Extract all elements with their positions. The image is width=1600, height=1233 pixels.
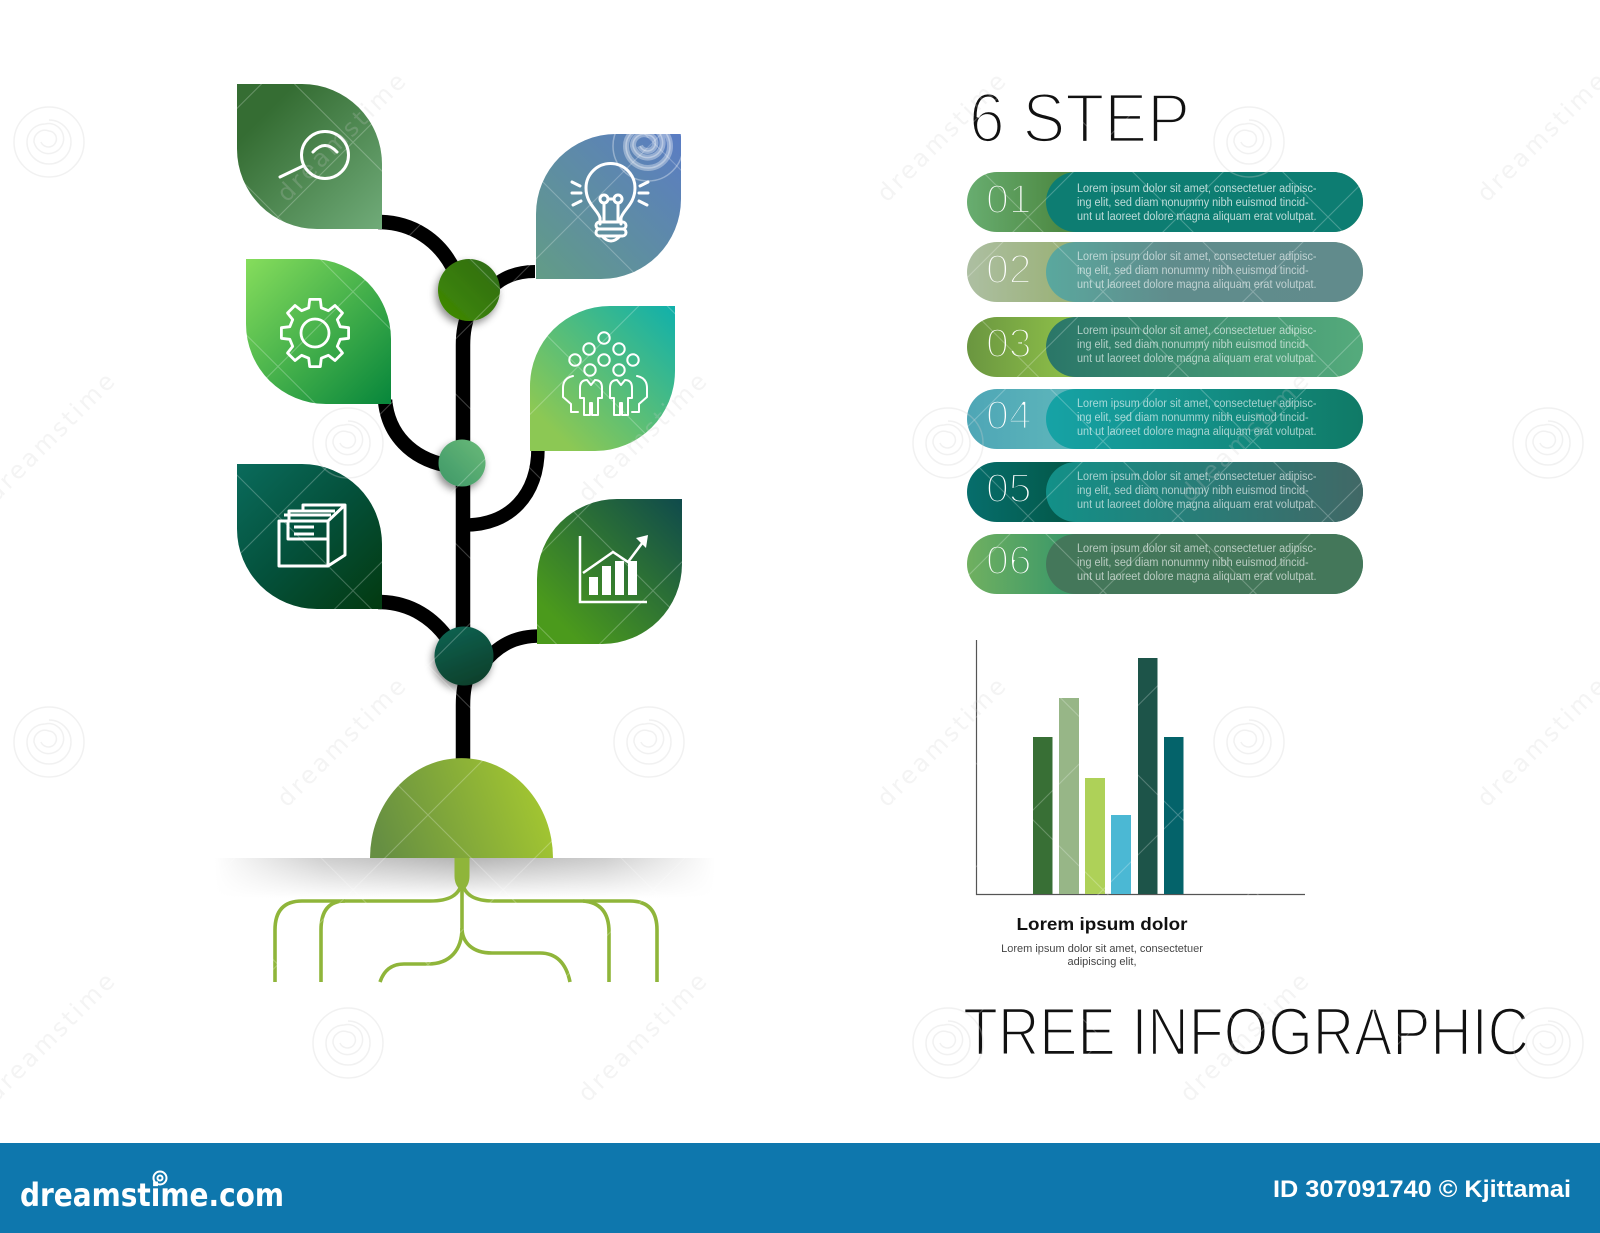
leaf: archive [237, 464, 382, 609]
step 01 [967, 172, 1363, 232]
step text 05: ing elit, sed diam nonummy nibh euismod tincid- [1077, 485, 1309, 497]
step text 06: ing elit, sed diam nonummy nibh euismod tincid- [1077, 557, 1309, 569]
watermark: dreamstime [271, 672, 411, 812]
icon: growth chart [580, 535, 648, 602]
leaf: idea [536, 134, 681, 279]
branch: leaf 2 [488, 272, 535, 292]
step text 05: unt ut laoreet dolore magna aliquam erat volutpat. [1077, 499, 1317, 511]
ground shadow [215, 858, 715, 898]
bar 5 [1138, 658, 1158, 894]
step number 01: 01 [986, 176, 1032, 222]
branch: leaf 3 [385, 400, 445, 465]
bar chart [976, 640, 1305, 894]
footer logo: dreamstime.com [20, 1176, 284, 1214]
bar 3 [1085, 778, 1105, 894]
icon: file box [279, 505, 345, 566]
step text 02: unt ut laoreet dolore magna aliquam erat volutpat. [1077, 279, 1317, 291]
step number 03: 03 [986, 320, 1032, 366]
footer credit: ID 307091740 © Kjittamai [1273, 1176, 1571, 1203]
watermark: dreamstime [572, 967, 712, 1107]
watermark: dreamstime [271, 67, 411, 207]
watermark: dreamstime [1174, 967, 1314, 1107]
footer logo spiral [154, 1172, 166, 1184]
icon: light bulb [572, 163, 648, 241]
node 2 [438, 440, 486, 486]
watermark: dreamstime [572, 367, 712, 507]
bar 2 [1059, 698, 1079, 894]
step text 03: Lorem ipsum dolor sit amet, consectetuer adipisc- [1077, 325, 1317, 337]
leaf: growth [537, 499, 682, 644]
step number 02: 02 [986, 246, 1032, 292]
step number 06: 06 [986, 537, 1032, 583]
watermark: dreamstime [871, 672, 1011, 812]
step text 01: ing elit, sed diam nonummy nibh euismod tincid- [1077, 197, 1309, 209]
branch: leaf 6 [482, 636, 540, 665]
step number 05: 05 [986, 465, 1032, 511]
step 03 [967, 317, 1363, 377]
chart caption: Lorem ipsum dolor sit amet, consectetuer [1001, 943, 1203, 955]
step number 04: 04 [986, 392, 1032, 438]
roots [275, 858, 657, 982]
step text 06: unt ut laoreet dolore magna aliquam erat volutpat. [1077, 571, 1317, 583]
branch: leaf 4 [465, 448, 538, 525]
leaf: settings [246, 259, 391, 404]
node 3 [434, 626, 494, 686]
title: 6 step: 6 STEP [969, 79, 1190, 157]
tree mound [370, 758, 553, 858]
watermark: dreamstime [871, 67, 1011, 207]
chart caption: adipiscing elit, [1067, 956, 1137, 968]
step 04 [967, 389, 1363, 449]
icon: magnifier [280, 132, 348, 178]
step text 04: ing elit, sed diam nonummy nibh euismod tincid- [1077, 412, 1309, 424]
step text 06: Lorem ipsum dolor sit amet, consectetuer adipisc- [1077, 543, 1317, 555]
step 06 [967, 534, 1363, 594]
step text 01: unt ut laoreet dolore magna aliquam erat volutpat. [1077, 211, 1317, 223]
step text 05: Lorem ipsum dolor sit amet, consectetuer adipisc- [1077, 471, 1317, 483]
bar 6 [1164, 737, 1184, 894]
icon: gear [281, 299, 349, 367]
watermark: dreamstime [1174, 367, 1314, 507]
step text 04: unt ut laoreet dolore magna aliquam erat volutpat. [1077, 426, 1317, 438]
leaf: team [530, 306, 675, 451]
step text 01: Lorem ipsum dolor sit amet, consectetuer adipisc- [1077, 183, 1317, 195]
tree trunk and branches [378, 222, 540, 765]
node 1 [438, 259, 500, 321]
branch: leaf 5 [378, 602, 452, 645]
footer bar [0, 1143, 1600, 1233]
step 02 [967, 242, 1363, 302]
step text 02: ing elit, sed diam nonummy nibh euismod tincid- [1077, 265, 1309, 277]
leaf: search [237, 84, 382, 229]
trunk [463, 290, 472, 765]
bar 4 [1111, 815, 1131, 894]
icon: people [563, 332, 647, 415]
step text 03: ing elit, sed diam nonummy nibh euismod tincid- [1077, 339, 1309, 351]
step 05 [967, 462, 1363, 522]
step text 04: Lorem ipsum dolor sit amet, consectetuer adipisc- [1077, 398, 1317, 410]
chart heading: Lorem ipsum dolor [1016, 914, 1188, 934]
step text 02: Lorem ipsum dolor sit amet, consectetuer adipisc- [1077, 251, 1317, 263]
branch: leaf 1 [378, 222, 455, 272]
bar 1 [1033, 737, 1052, 894]
step text 03: unt ut laoreet dolore magna aliquam erat volutpat. [1077, 353, 1317, 365]
